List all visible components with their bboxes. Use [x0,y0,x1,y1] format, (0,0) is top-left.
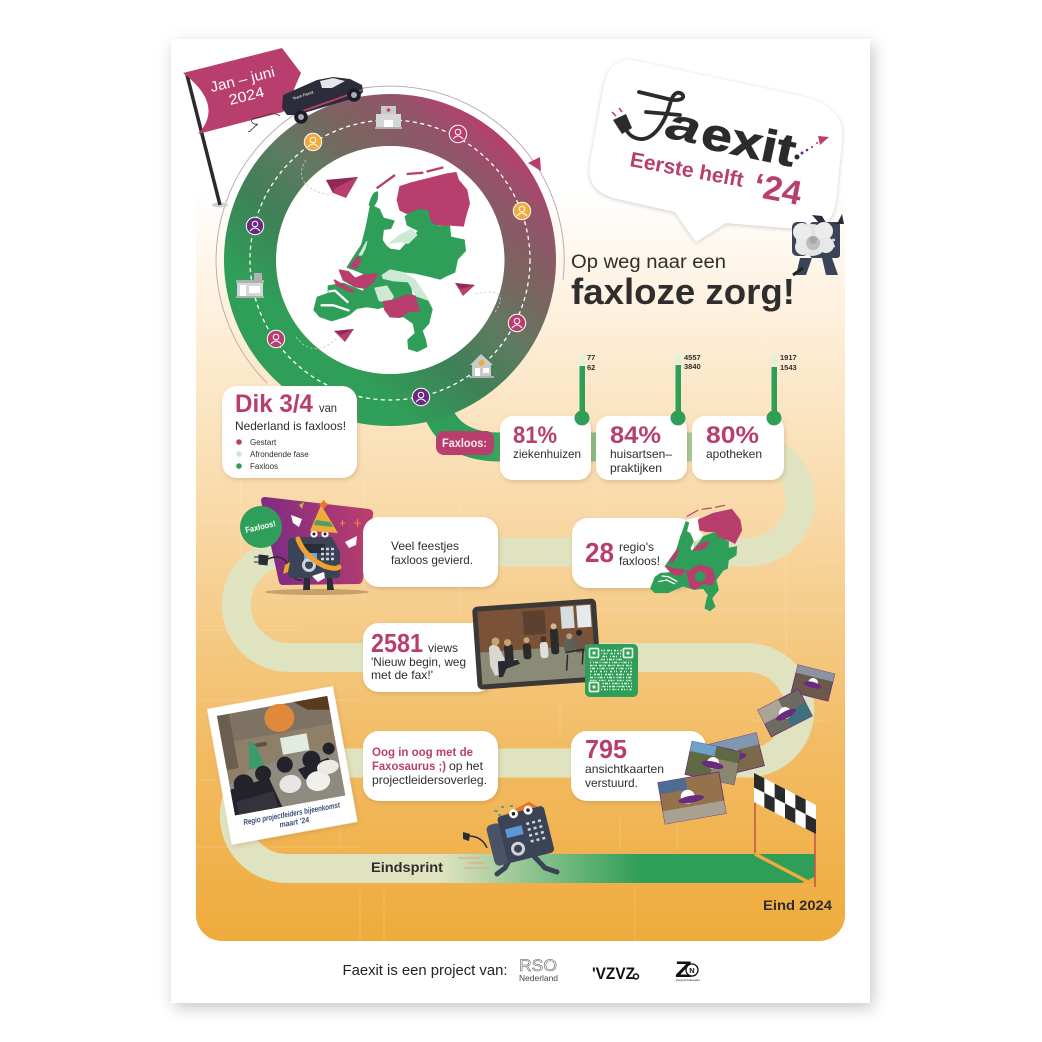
card: 28 regio's: faxloos! [619,554,660,568]
postcard 2 [758,689,812,737]
thin orbit arc [216,86,564,383]
card: 795 ansichtkaarten [571,731,706,801]
logo: ZN: N [689,966,695,975]
card: 80% apotheken: 80% [706,422,759,449]
road: winding path [234,447,801,868]
logo: ZN [675,957,700,982]
card: Dik 3/4: van [319,401,337,415]
thermometer: ziekenhuizen: 62 [587,363,595,372]
checkered banner [754,773,816,834]
icon: house [469,354,494,378]
postcard 1 [791,665,835,701]
ring with map [250,120,530,400]
polaroid photo [207,686,358,845]
card: Veel feestjes [363,517,498,587]
logo: RSO Nederland [519,956,558,983]
icon: hospital [375,106,402,129]
road: final sprint [440,854,816,884]
card: 28 regio's: 28 [585,537,614,568]
postcard 5 [658,772,726,824]
card: 28 regio's: regio's [619,540,654,554]
sparkles [340,519,361,527]
thermometer: apotheken: 1917 [780,353,797,362]
card: 84% huisartsenpraktijken: 84% [610,422,661,449]
confetti [283,502,357,582]
party hat [310,505,338,533]
logo text: exit [697,107,800,177]
cord and plug [268,557,302,580]
logo cord and F [623,92,683,139]
flag cloth [183,48,301,134]
card: Oog in oog: Oog in oog met de [372,745,473,759]
card: 2581 views [363,623,493,692]
paper planes [326,157,541,342]
legend: Faxloos [250,462,278,471]
thermometer: ziekenhuizen: 77 [587,353,595,362]
tablet with video still [472,598,601,690]
card: 795 ansichtkaarten: ansichtkaarten [585,762,664,776]
thermometer: huisartsen: 3840 [684,362,701,371]
dashed flight trails [296,160,500,349]
icon: van: Team Faexit [292,89,315,101]
panel: gradient background [196,120,845,941]
node: purple person left [246,217,264,235]
poles [755,800,815,887]
thermometer: apotheken: 1543 [780,363,797,372]
finish gate [754,773,816,887]
garland [298,539,339,568]
logo: VZVZ: 'VZVZ [592,964,635,983]
flag base [212,202,228,208]
ring nodes [246,125,531,406]
card: Oog in oog: projectleidersoverleg. [372,773,487,787]
small map [651,505,742,611]
logo: ZN: Z [675,957,692,982]
legend: Afrondende fase [250,450,309,459]
card: 81% ziekenhuizen [500,416,591,480]
card: 795 ansichtkaarten: 795 [585,734,627,764]
running fax [458,799,557,874]
speed lines [458,858,490,868]
legend: Gestart [250,438,277,447]
card: 81% ziekenhuizen: 81% [513,422,557,449]
label: Faxloos pill [436,431,494,455]
party fax illustration [240,497,373,595]
QR code [585,644,638,697]
label: Faxloos pill: Faxloos: [442,438,487,450]
card: 795 ansichtkaarten: verstuurd. [585,776,638,790]
fax body [288,538,302,578]
footer text: Faexit is een project van: [342,962,508,979]
subtitle: Eerste helft [628,148,745,192]
icon: pharmacy [236,273,264,298]
flag [183,48,301,208]
year: ‘24 [750,167,805,213]
road: start section from ring to apotheken [438,412,750,447]
logo plug [613,114,632,134]
polaroid caption: Regio projectleiders bijeenkomst [243,800,341,827]
card: 2581 views: views [428,641,458,655]
node: orange person [304,133,322,151]
poster sheet [171,39,870,1003]
shadow [265,589,369,595]
logo text [662,99,800,177]
flag text: 2024 [227,85,266,109]
cord behind van [248,114,280,132]
card: 84% huisartsenpraktijken: praktijken [610,461,662,475]
label: Eindsprint: Eindsprint [371,859,443,875]
postcard 3 [710,733,764,777]
speech bubble logo [590,60,842,242]
card: Dik 3/4: Dik 3/4 [235,390,313,418]
legend [236,438,309,471]
heading: faxloze zorg! [571,271,795,312]
party background [261,497,373,585]
card: Veel feestjes: Veel feestjes [391,539,459,553]
card: 80% apotheken [692,416,784,480]
card: Dik 3/4 [222,386,357,478]
exploding fax [792,214,844,275]
logo text: a [662,99,705,154]
thermometer: huisartsen: 4557 [684,353,701,362]
bubble: Faxloos: Faxloos! [244,518,277,535]
logo: RSO Nederland: RSO [519,956,557,975]
legs [497,850,557,874]
card: 81% ziekenhuizen: ziekenhuizen [513,447,581,461]
node: pink person left [267,330,285,348]
body [482,799,555,867]
postcard 4 [685,741,741,785]
thermometer: huisartsen [670,353,701,426]
footer [342,956,700,983]
card: 2581 views: 'Nieuw begin, weg [371,655,466,669]
logo dots and plane [794,136,829,160]
card: Oog in oog: Faxosaurus ;) [372,759,446,773]
card: 84% huisartsenpraktijken: huisartsen– [610,447,672,461]
polaroid caption: maart '24 [279,815,310,830]
thermometer: apotheken [766,353,797,426]
node: pink person top [449,125,467,143]
flag pole [187,75,220,205]
logo: RSO Nederland: Nederland [519,973,558,983]
flag text [209,65,281,113]
thermometer: ziekenhuizen [574,353,595,426]
map of the Netherlands [314,167,469,351]
node: purple person bottom [412,388,430,406]
card: 2581 views: 2581 [371,628,423,658]
heading [571,252,795,312]
card: Oog in oog: op het [449,759,484,773]
card: Veel feestjes: faxloos gevierd. [391,553,473,567]
card: 84% huisartsenpraktijken [596,416,687,480]
card: 80% apotheken: apotheken [706,447,762,461]
polaroid caption [243,800,343,836]
bubble [590,60,842,242]
node: orange person right [513,202,531,220]
plug and cord [468,836,487,848]
heading: Op weg naar een [571,252,726,273]
card: Oog in oog [363,731,498,801]
card: 2581 views: met de fax!' [371,668,433,682]
sweat drops [494,806,513,815]
flag text: Jan – juni [209,65,277,96]
card: 28 regio's [572,518,694,588]
logo: ZN: Zorgverzekeraars [676,978,700,982]
card: Dik 3/4: Nederland is faxloos! [235,419,346,433]
node: pink person right [508,314,526,332]
label: Eind 2024: Eind 2024 [763,897,832,913]
icon: van [282,77,363,124]
